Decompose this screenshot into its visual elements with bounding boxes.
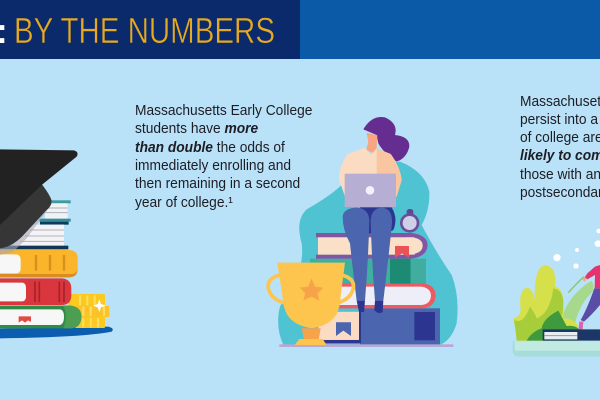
floor line [279,344,453,347]
teal blob background [278,162,458,345]
red book [0,278,71,305]
coins [68,294,109,328]
yellow book [0,250,78,277]
shoes [357,301,383,313]
illustration: runner on book with plants [513,229,600,357]
purple book [316,233,428,259]
runner [579,265,600,329]
text block: early college odds: year of college.¹ [135,194,233,210]
rainbow arc [562,281,594,323]
book under runner [543,329,600,341]
illustration: graduation cap on books and coins [0,149,113,338]
illustration: woman with laptop on books with trophy [268,117,458,347]
face and neck [366,133,377,154]
header banner [0,0,600,59]
green book [310,259,426,284]
second book [0,225,68,249]
base shadow [0,327,113,338]
text block: early college odds: immediately enrolling and [135,157,291,173]
text block: early college odds: than double the odds of [135,139,285,155]
text block: early college odds: Massachusetts Early College [135,102,313,118]
woman [339,117,409,313]
title: BY THE NUMBERS [14,10,275,51]
torso [339,148,402,197]
hair [363,117,409,162]
laptop [345,174,396,207]
text block: persistence, cropped at right edge: those with an [520,166,600,182]
sparkle dots [553,229,600,269]
platform [513,341,600,357]
stopwatch [400,209,419,233]
blue box [360,308,440,344]
text block: early college odds: students have more [135,120,258,136]
top book [39,200,71,225]
red-rimmed book [337,283,436,308]
text block: persistence, cropped at right edge [520,93,600,200]
mortarboard cap [0,149,78,255]
green book [0,306,81,328]
text block: persistence, cropped at right edge: persist into a [520,111,598,127]
text block: early college odds [135,102,313,210]
trophy [268,263,361,345]
text block: early college odds: then remaining in a second [135,175,300,191]
plants [513,265,578,341]
legs [360,207,395,233]
